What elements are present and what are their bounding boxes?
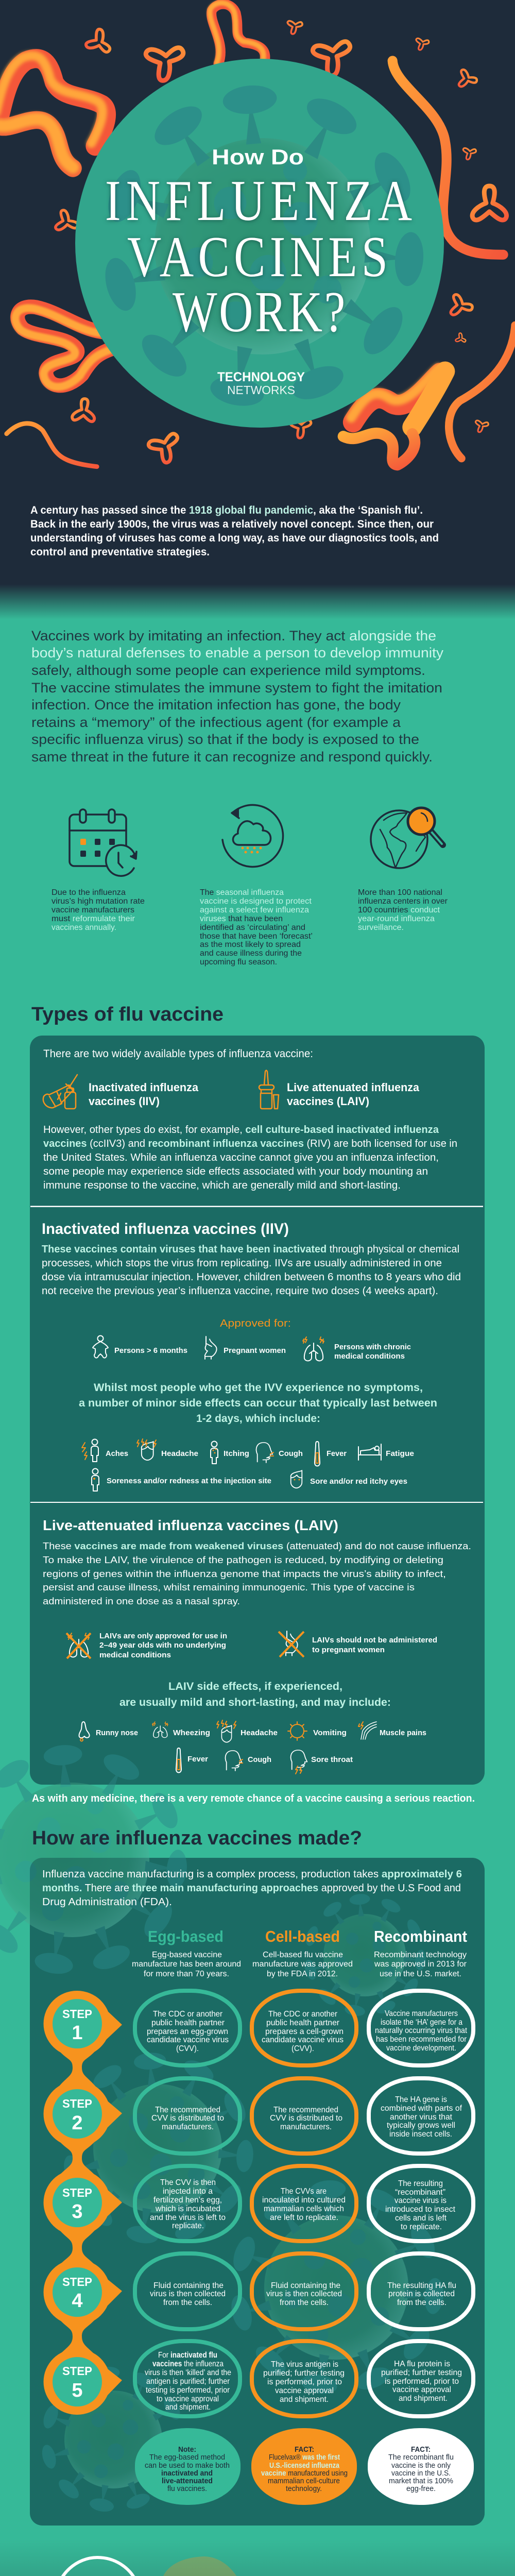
- step 3 text: The CVV is then: [160, 2178, 216, 2187]
- step 2 text: manufacturers.: [162, 2123, 214, 2131]
- caption: seasonal vaccine: viruses that have been: [200, 914, 283, 923]
- step 5 text: and shipment.: [280, 2395, 329, 2404]
- caption: seasonal vaccine: identified as ‘circulating’ and: [200, 923, 305, 932]
- IIV side effects icons: [82, 1439, 414, 1491]
- step 5 text: For inactivated flu: [158, 2351, 217, 2360]
- step 2 text: CVV is distributed to: [270, 2114, 342, 2123]
- logo: TECHNOLOGY: [217, 370, 305, 384]
- step 3 text: to replicate.: [401, 2223, 442, 2231]
- step 5: 5: [72, 2380, 83, 2401]
- caption: reformulate annually: must reformulate their: [52, 914, 135, 923]
- approved groups with icons: Persons with chronic: [334, 1343, 411, 1351]
- IIV side effects icons: Fever: [327, 1449, 347, 1458]
- approved groups with icons: medical conditions: [334, 1352, 405, 1361]
- LAIV description: These vaccines are made from weakened viruses (attenuated) and do not cause influenza.: [43, 1541, 471, 1551]
- step 1 text: candidate vaccine virus: [147, 2036, 229, 2044]
- vaccines explanation paragraph: safely, although some people can experience mild symptoms.: [31, 663, 425, 678]
- LAIV description: persist and cause illness, whilst remaining immunogenic. This type of vaccine is: [43, 1582, 415, 1592]
- step 3 text: mammalian cells which: [264, 2205, 344, 2213]
- fact: recombinant: market that is 100%: [389, 2477, 453, 2485]
- vaccines explanation paragraph: infection. Once the imitation infection has gone, the body: [31, 697, 401, 713]
- step 1 text: isolate the ‘HA’ gene for a: [381, 2018, 462, 2027]
- label: live attenuated vaccines: [287, 1081, 420, 1108]
- step 5 text: is performed, prior to: [385, 2377, 459, 2386]
- step 3 text: vaccine virus is: [394, 2196, 447, 2205]
- step 5 text: virus is then ‘killed’ and the: [145, 2368, 231, 2377]
- step 4: [43, 2259, 122, 2325]
- intro text: [30, 504, 439, 558]
- LAIV restrictions: LAIVs should not be administered: [312, 1636, 437, 1645]
- step 4 text: protein is collected: [388, 2290, 455, 2298]
- step 1 text: public health partner: [151, 2019, 225, 2027]
- step spine: [43, 1991, 122, 2415]
- IIV side effects icons: Aches: [106, 1449, 128, 1458]
- step 5 text: purified; further testing: [263, 2369, 345, 2378]
- recombinant step rings: [369, 1991, 473, 2416]
- caption: seasonal vaccine: against a select few influenza: [200, 906, 309, 914]
- logo: NETWORKS: [227, 383, 295, 397]
- column heading: cell-based: [252, 1927, 353, 1978]
- heading: how are influenza vaccines made: How are influenza vaccines made?: [32, 1827, 362, 1849]
- step 4 text: The resulting HA flu: [387, 2281, 456, 2290]
- LAIV side effects icons: Runny nose: [96, 1728, 138, 1737]
- step 2: STEP: [62, 2097, 92, 2110]
- step 4 text: Fluid containing the: [153, 2281, 224, 2290]
- caption: seasonal vaccine: those that have been ‘forecast’: [200, 932, 313, 941]
- caption: surveillance: influenza centers in over: [358, 897, 448, 906]
- intro text: control and preventative strategies.: [30, 546, 210, 558]
- step 3 text: The CVVs are: [281, 2187, 327, 2196]
- minor side effects statement: Whilst most people who get the IVV experience no symptoms,: [94, 1382, 423, 1394]
- step 1: 1: [72, 2022, 83, 2044]
- other vaccine types paragraph: However, other types do exist, for example, cell culture-based inactivated influenza: [43, 1124, 439, 1136]
- heading: inactivated influenza vaccines: Inactivated influenza vaccines (IIV): [42, 1221, 289, 1238]
- label: live attenuated vaccines: vaccines (LAIV): [287, 1095, 369, 1108]
- step 2 text: The recommended: [273, 2106, 338, 2114]
- note: egg-based: Note:: [178, 2445, 196, 2454]
- step 5 text: [145, 2351, 462, 2412]
- manufacturing intro: Drug Administration (FDA).: [42, 1896, 172, 1908]
- column heading: recombinant: [374, 1927, 467, 1978]
- column heading: recombinant: Recombinant: [374, 1927, 467, 1945]
- icon: seasonal cycle cloud: [222, 805, 283, 867]
- fact: cell-based: vaccine manufactured using: [261, 2469, 348, 2478]
- step 1 text: [147, 2009, 467, 2053]
- LAIV side effects icons: Cough: [248, 1755, 271, 1764]
- step 3 text: introduced to insect: [385, 2205, 456, 2214]
- LAIV restrictions: LAIVs are only approved for use in: [99, 1632, 227, 1640]
- vaccines explanation paragraph: The vaccine stimulates the immune system to fight the imitation: [31, 680, 442, 696]
- title: WORK?: [173, 281, 345, 344]
- label: inactivated vaccines: Inactivated influenza: [89, 1081, 199, 1094]
- LAIV restrictions: medical conditions: [99, 1651, 171, 1659]
- LAIV side effects icons: Sore throat: [311, 1755, 353, 1764]
- step 2: 2: [72, 2112, 83, 2134]
- header teal circle: [75, 59, 444, 428]
- LAIV side effects icons: Muscle pains: [380, 1728, 426, 1737]
- column heading: cell-based: Cell-based: [265, 1927, 340, 1945]
- caption: reformulate annually: [52, 888, 145, 932]
- step 5 text: vaccine approval: [392, 2385, 451, 2394]
- icon: calendar with clock: [70, 809, 136, 876]
- step 3: [43, 2170, 122, 2235]
- LAIV side effects icons: Vomiting: [313, 1728, 347, 1737]
- logo: [217, 370, 305, 397]
- column heading: egg-based: for more than 70 years.: [144, 1970, 229, 1978]
- step 4: STEP: [62, 2275, 92, 2289]
- vaccines explanation paragraph: specific influenza virus) so that if the body is exposed to the: [31, 732, 419, 747]
- IIV description: processes, which stops the virus from replicating. IIVs are usually administered in one: [42, 1258, 442, 1269]
- step 2 text: another virus that: [390, 2113, 453, 2122]
- caption: surveillance: More than 100 national: [358, 888, 442, 897]
- step 1 text: has been recommended for: [376, 2035, 467, 2044]
- vaccines explanation paragraph: retains a “memory” of the infectious agent (for example a: [31, 715, 401, 730]
- caption: reformulate annually: vaccines annually.: [52, 923, 116, 932]
- fact: cell-based: technology.: [286, 2484, 322, 2493]
- caption: seasonal vaccine: upcoming flu season.: [200, 958, 277, 967]
- IIV description: These vaccines contain viruses that have been inactivated through physical or chemical: [42, 1244, 459, 1255]
- LAIV side effects statement: [119, 1681, 391, 1708]
- LAIV description: regions of genes within the influenza genome that impacts the virus’s ability to infect,: [43, 1569, 446, 1579]
- IIV side effects icons: Itching: [224, 1449, 249, 1458]
- step 5 text: purified; further testing: [381, 2368, 462, 2377]
- step 3 text: The resulting: [398, 2179, 443, 2188]
- step 3: 3: [72, 2201, 83, 2223]
- note: egg-based: can be used to make both: [145, 2461, 230, 2470]
- step 5 text: antigen is purified; further: [146, 2377, 230, 2386]
- caption: seasonal vaccine: vaccine is designed to protect: [200, 897, 312, 906]
- egg-based step rings: [135, 1991, 240, 2416]
- step 3 text: injected into a: [163, 2187, 213, 2196]
- IIV description: not receive the previous year’s influenza vaccine, require two doses (4 weeks apart).: [42, 1285, 438, 1297]
- other vaccine types paragraph: some people may experience side effects associated with your body mounting an: [43, 1166, 428, 1177]
- step 1: [43, 1991, 122, 2057]
- icon: nasal spray: [259, 1071, 279, 1109]
- step 3 text: replicate.: [172, 2222, 204, 2230]
- IIV side effects icons: Sore and/or red itchy eyes: [310, 1477, 407, 1486]
- fact: recombinant: [368, 2428, 474, 2505]
- vaccines explanation paragraph: Vaccines work by imitating an infection. They act alongside the: [31, 628, 436, 643]
- vaccines explanation paragraph: [31, 628, 444, 765]
- fact: cell-based: mammalian cell-culture: [268, 2477, 340, 2485]
- step 4 text: virus is then collected: [266, 2290, 342, 2298]
- step 4 text: [150, 2281, 456, 2307]
- step 4 text: from the cells.: [163, 2298, 212, 2307]
- caption: seasonal vaccine: The seasonal influenza: [200, 888, 284, 897]
- approved groups with icons: Pregnant women: [224, 1346, 286, 1355]
- note: egg-based: inactivated and: [161, 2469, 213, 2478]
- vaccines explanation paragraph: body’s natural defenses to enable a person to develop immunity: [31, 645, 444, 660]
- step 5 text: and shipment.: [165, 2403, 211, 2412]
- manufacturing intro: Influenza vaccine manufacturing is a complex process, production takes approximately 6: [42, 1869, 462, 1880]
- step 1 text: prepares a cell-grown: [265, 2027, 344, 2036]
- IIV side effects icons: Headache: [161, 1449, 198, 1458]
- step 1 text: The CDC or another: [153, 2010, 223, 2019]
- column heading: cell-based: manufacture was approved: [252, 1960, 353, 1969]
- fact: cell-based: Flucelvax® was the first: [269, 2453, 340, 2462]
- approved groups with icons: Persons > 6 months: [114, 1346, 187, 1355]
- intro text: A century has passed since the 1918 global flu pandemic, aka the ‘Spanish flu’.: [30, 504, 423, 516]
- fact: recombinant: FACT:: [411, 2445, 431, 2454]
- caption: seasonal vaccine: and cause illness during the: [200, 949, 302, 958]
- other vaccine types paragraph: the United States. While an influenza vaccine cannot give you an influenza infection,: [43, 1152, 439, 1163]
- approved groups with icons: [93, 1335, 411, 1361]
- LAIV side effects icons: Headache: [241, 1728, 278, 1737]
- label: inactivated vaccines: [89, 1081, 199, 1108]
- other vaccine types paragraph: immune response to the vaccine, which are generally mild and short-lasting.: [43, 1180, 401, 1191]
- caption: seasonal vaccine: [200, 888, 313, 967]
- caption: surveillance: [358, 888, 448, 932]
- step 2 text: inside insect cells.: [389, 2130, 452, 2139]
- panel: types of flu vaccine: [30, 1036, 485, 1785]
- approved for heading: Approved for:: [220, 1318, 291, 1329]
- column heading: egg-based: Egg-based vaccine: [152, 1951, 222, 1959]
- fact: cell-based: [251, 2428, 357, 2505]
- virus illustration in circle: [100, 83, 425, 410]
- step 5: [43, 2349, 122, 2415]
- caption: surveillance: year-round influenza: [358, 914, 435, 923]
- LAIV side effects icons: Fever: [187, 1755, 208, 1764]
- step 1 text: prepares an egg-grown: [147, 2027, 228, 2036]
- title: INFLUENZA: [105, 170, 412, 233]
- step 4 text: virus is then collected: [150, 2290, 226, 2298]
- step 3: STEP: [62, 2186, 92, 2199]
- IIV side effects icons: Fatigue: [386, 1449, 414, 1458]
- IIV description: dose via intramuscular injection. However, children between 6 months to 8 years who did: [42, 1272, 461, 1283]
- step 2 text: The recommended: [155, 2106, 220, 2114]
- column heading: recombinant: was approved in 2013 for: [374, 1960, 467, 1969]
- step 1 text: naturally occurring virus that: [375, 2026, 467, 2035]
- step 4 text: from the cells.: [397, 2298, 447, 2307]
- fact: recombinant: vaccine is the only: [391, 2461, 451, 2470]
- cell-based step rings: [252, 1991, 356, 2416]
- step 1: STEP: [62, 2007, 92, 2021]
- fact: cell-based: FACT:: [295, 2445, 314, 2454]
- step 1 text: public health partner: [266, 2019, 340, 2027]
- icon: globe with magnifying glass: [371, 808, 443, 868]
- step 3 text: cells and is left: [395, 2214, 447, 2223]
- minor side effects statement: a number of minor side effects can occur that typically last between: [79, 1397, 437, 1409]
- step 5: STEP: [62, 2364, 92, 2378]
- step 2 text: The HA gene is: [395, 2095, 447, 2104]
- manufacturing intro: months. There are three main manufacturing approaches approved by the U.S Food and: [42, 1883, 461, 1894]
- step 1 text: (CVV).: [291, 2044, 314, 2053]
- step 3 text: “recombinant”: [395, 2188, 445, 2197]
- IIV description: [42, 1244, 461, 1297]
- other vaccine types paragraph: [43, 1124, 457, 1191]
- intro text: Back in the early 1900s, the virus was a relatively novel concept. Since then, our: [30, 518, 434, 530]
- step 5 text: testing is performed, prior: [146, 2386, 230, 2395]
- IIV side effects icons: Soreness and/or redness at the injection site: [107, 1477, 271, 1485]
- title: [105, 145, 412, 344]
- step 5 text: and shipment.: [399, 2394, 448, 2403]
- column heading: egg-based: manufacture has been around: [132, 1960, 241, 1969]
- LAIV restrictions: to pregnant women: [312, 1646, 385, 1654]
- caption: reformulate annually: vaccine manufacturers: [52, 906, 134, 914]
- step 3 text: fertilized hen’s egg,: [153, 2196, 222, 2205]
- step 1 text: vaccine development.: [386, 2044, 456, 2053]
- manufacturing intro: [42, 1869, 462, 1908]
- step 4 text: Fluid containing the: [271, 2281, 340, 2290]
- step 3 text: inoculated into cultured: [262, 2196, 346, 2205]
- step 2 text: typically grows well: [387, 2121, 455, 2130]
- step 1 text: Vaccine manufacturers: [385, 2009, 458, 2018]
- heading: live-attenuated influenza vaccines: Live-attenuated influenza vaccines (LAIV): [43, 1517, 338, 1533]
- label: live attenuated vaccines: Live attenuated influenza: [287, 1081, 420, 1094]
- vaccines explanation paragraph: same threat in the future it can recognize and respond quickly.: [31, 749, 433, 765]
- step 3 text: [150, 2178, 456, 2231]
- panel: how vaccines are made: [30, 1858, 485, 2526]
- step 3 text: and the virus is left to: [150, 2213, 226, 2222]
- column heading: cell-based: by the FDA in 2012.: [267, 1970, 338, 1978]
- step 2: [43, 2081, 122, 2147]
- intro text: understanding of viruses has come a long way, as have our diagnostics tools, and: [30, 532, 439, 544]
- step 2 text: [151, 2095, 462, 2139]
- note: egg-based: The egg-based method: [149, 2453, 225, 2462]
- column heading: recombinant: Recombinant technology: [374, 1951, 467, 1959]
- fact: recombinant: vaccine in the U.S.: [391, 2469, 451, 2478]
- virus background illustrations: [0, 1743, 445, 2514]
- LAIV restrictions: 2–49 year olds with no underlying: [99, 1641, 226, 1650]
- caption: surveillance: surveillance.: [358, 923, 404, 932]
- minor side effects statement: [79, 1382, 437, 1425]
- step 5 text: The virus antigen is: [271, 2360, 338, 2369]
- title: How Do: [212, 145, 304, 169]
- step 3 text: are left to replicate.: [270, 2213, 338, 2222]
- LAIV description: [43, 1541, 471, 1606]
- fact: cell-based: U.S.-licensed influenza: [269, 2461, 340, 2470]
- step 5 text: vaccine approval: [275, 2386, 334, 2395]
- fact: recombinant: egg-free.: [406, 2484, 436, 2493]
- column heading: egg-based: Egg-based: [148, 1927, 224, 1945]
- caption: reformulate annually: virus’s high mutation rate: [52, 897, 145, 906]
- column heading: egg-based: [132, 1927, 241, 1978]
- LAIV description: administered in one dose as a nasal spray.: [43, 1596, 240, 1606]
- minor side effects statement: 1-2 days, which include:: [196, 1413, 320, 1425]
- serious reaction statement: As with any medicine, there is a very remote chance of a vaccine causing a serious reaction.: [32, 1793, 475, 1804]
- LAIV side effects statement: LAIV side effects, if experienced,: [168, 1681, 342, 1692]
- header flu virus squiggles: [0, 3, 515, 467]
- step 1 text: candidate vaccine virus: [262, 2036, 344, 2044]
- LAIV description: To make the LAIV, the virulence of the pathogen is reduced, by modifying or deleting: [43, 1555, 443, 1565]
- other vaccine types paragraph: vaccines (ccIIV3) and recombinant influenza vaccines (RIV) are both licensed for use in: [43, 1138, 457, 1149]
- fact: recombinant: The recombinant flu: [388, 2453, 454, 2462]
- step 2 text: manufacturers.: [280, 2123, 332, 2131]
- icon: baby: [93, 1335, 108, 1358]
- LAIV side effects icons: Wheezing: [173, 1728, 210, 1737]
- step 5 text: is performed, prior to: [267, 2378, 342, 2386]
- intro to vaccine types: There are two widely available types of influenza vaccine:: [43, 1048, 313, 1060]
- LAIV side effects statement: are usually mild and short-lasting, and may include:: [119, 1697, 391, 1708]
- step 1 text: The CDC or another: [268, 2010, 338, 2019]
- step 1 text: (CVV).: [176, 2044, 199, 2053]
- step 2 text: CVV is distributed to: [151, 2114, 224, 2123]
- title: VACCINES: [127, 226, 388, 289]
- step 4: 4: [72, 2290, 83, 2312]
- LAIV side effects icons: [79, 1720, 426, 1774]
- step 4 text: from the cells.: [280, 2298, 329, 2307]
- note: egg-based: flu vaccines.: [167, 2484, 207, 2493]
- step 3 text: which is incubated: [155, 2205, 220, 2213]
- step 5 text: vaccines the influenza: [152, 2360, 224, 2368]
- note: egg-based: live-attenuated: [162, 2477, 213, 2485]
- icon: syringe and vial: [43, 1075, 77, 1109]
- LAIV restrictions: [66, 1631, 437, 1659]
- step 5 text: HA flu protein is: [394, 2360, 450, 2368]
- label: inactivated vaccines: vaccines (IIV): [89, 1095, 160, 1108]
- caption: reformulate annually: Due to the influenza: [52, 888, 126, 897]
- caption: surveillance: 100 countries conduct: [358, 906, 440, 914]
- cough cloud: [145, 2556, 294, 2576]
- heading: types of flu vaccine: Types of flu vaccine: [31, 1004, 224, 1025]
- step 2 text: combined with parts of: [381, 2104, 462, 2113]
- IIV side effects icons: Cough: [279, 1449, 303, 1458]
- column heading: cell-based: Cell-based flu vaccine: [263, 1951, 343, 1959]
- column heading: recombinant: use in the U.S. market.: [380, 1970, 461, 1978]
- caption: seasonal vaccine: as the most likely to spread: [200, 940, 301, 949]
- note: egg-based: [135, 2428, 241, 2505]
- step 5 text: to vaccine approval: [157, 2395, 219, 2403]
- icon: coughing head: [56, 2557, 158, 2576]
